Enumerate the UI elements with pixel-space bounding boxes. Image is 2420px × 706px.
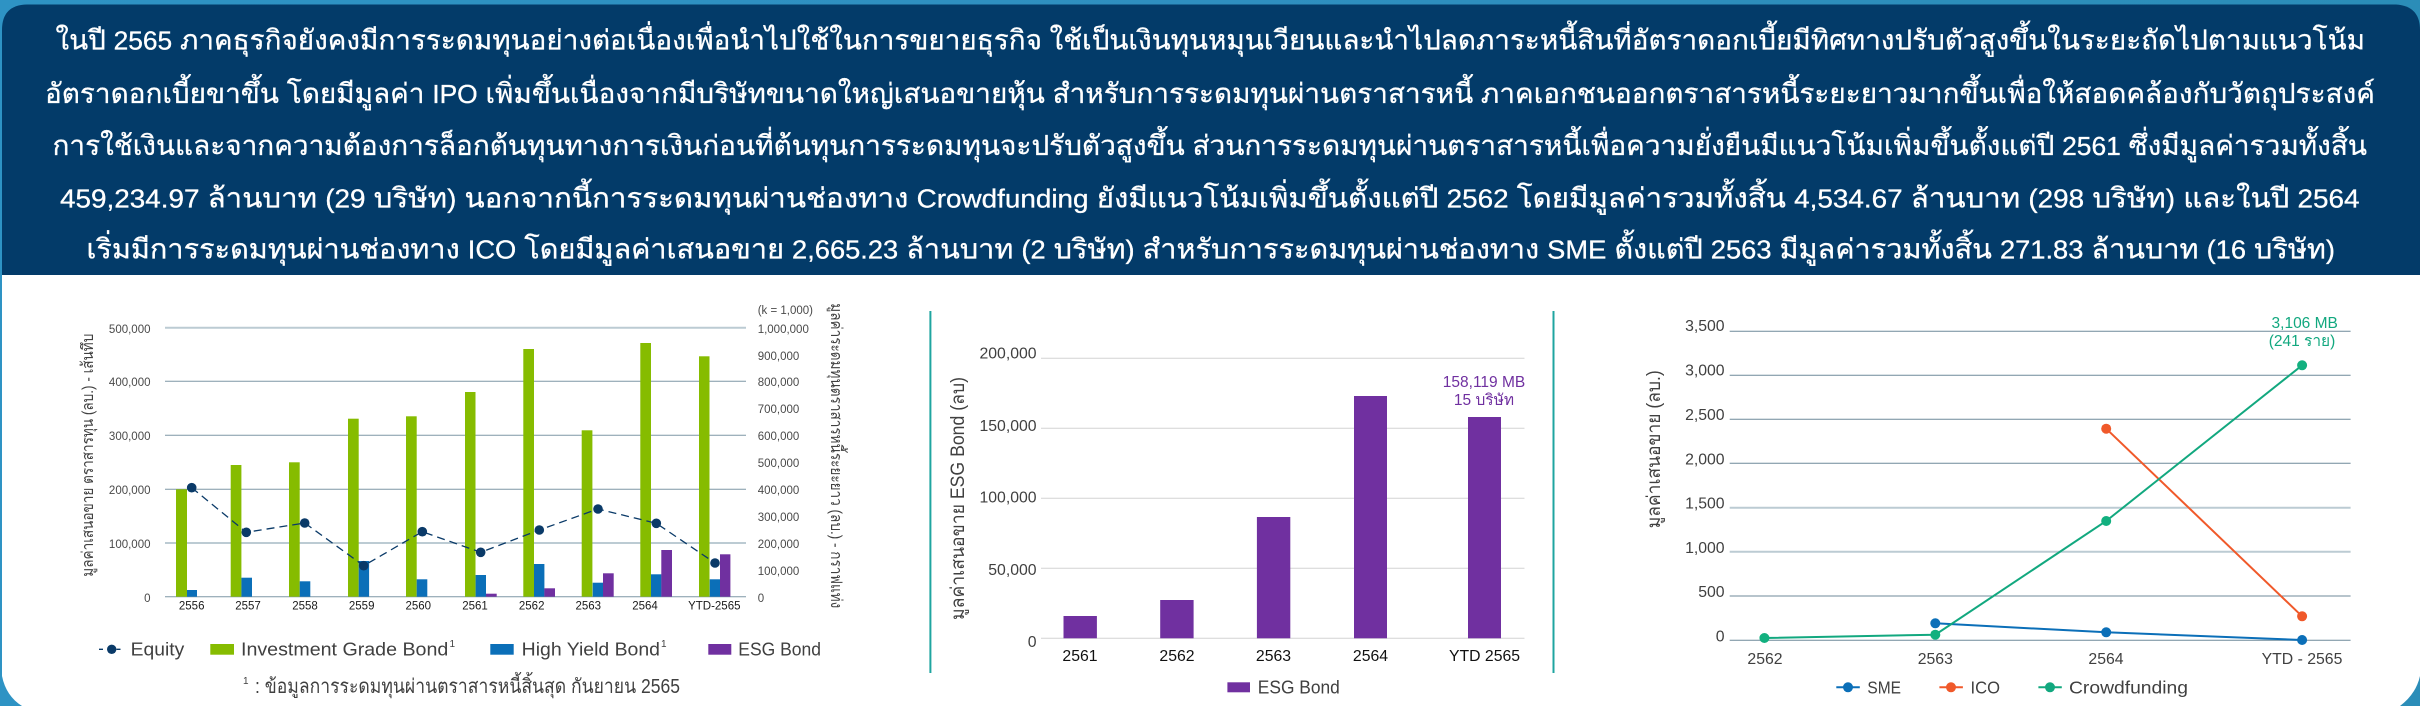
callout: 3,106 MB: [2269, 315, 2338, 350]
x axis labels: 2562: [519, 600, 544, 612]
bars: investment grade bond: [176, 343, 710, 597]
header background: [2, 4, 2420, 275]
y axis labels: 2,500: [1685, 407, 1725, 424]
legend: Equity: [131, 640, 184, 660]
x axis labels: 2559: [349, 600, 374, 612]
header text block: อัตราดอกเบี้ยขาขึ้น โดยมีมูลค่า IPO เพิ่มขึ้นเนื่องจากมีบริษัทขนาดใหญ่เสนอขายหุ้น สำหรับการระดมทุนผ่านตราสารหนี้ ภาคเอกชนออกตราสารหนี้ระยะยาวมากขึ้นเพื่อให้สอดคล้องกับวัตถุประสงค์: [45, 74, 2375, 111]
y axis labels: 2,000: [1685, 452, 1725, 468]
y axis labels: 200,000: [979, 346, 1037, 362]
footnote: 1: [243, 676, 249, 687]
left axis labels: 200,000: [109, 485, 150, 497]
x axis labels: [1747, 651, 2343, 668]
footnote: : ข้อมูลการระดมทุนผ่านตราสารหนี้สิ้นสุด กันยายน 2565: [255, 672, 680, 699]
right axis labels: 500,000: [758, 458, 799, 470]
x axis labels: 2563: [1256, 648, 1291, 665]
y axis labels: 100,000: [979, 490, 1037, 506]
right axis labels: 100,000: [758, 566, 799, 578]
x axis labels: 2564: [632, 600, 658, 612]
left axis labels: 300,000: [109, 431, 150, 443]
x axis labels: 2562: [1159, 648, 1195, 665]
y axis labels: 3,000: [1685, 362, 1725, 380]
left axis labels: 400,000: [109, 377, 150, 389]
right axis title: มูลค่าระดมทุนตราสารหนี้ระยะยาว (ลบ.) - กราฟแท่ง: [826, 303, 848, 608]
right axis labels: [758, 305, 813, 605]
header text block: เริ่มมีการระดมทุนผ่านช่องทาง ICO โดยมีมูลค่าเสนอขาย 2,665.23 ล้านบาท (2 บริษัท) สำหรับการระดมทุนผ่านช่องทาง SME ตั้งแต่ปี 2563 มีมูลค่ารวมทั้งสิ้น 271.83 ล้านบาท (16 บริษัท): [86, 229, 2335, 266]
left axis labels: 0: [144, 593, 150, 605]
x axis labels: 2557: [235, 600, 261, 612]
y axis labels: 0: [1028, 634, 1037, 651]
y axis labels: [979, 346, 1037, 651]
left axis title: มูลค่าเสนอขาย ตราสารทุน (ลบ.) - เส้นทึบ: [79, 334, 98, 577]
line: equity: [187, 483, 720, 570]
legend: 1: [661, 639, 667, 650]
panel: ESG bond chart: [930, 311, 1554, 698]
callout: 158,119 MB: 158,119 MB: [1443, 374, 1525, 391]
y axis labels: 3,500: [1685, 318, 1725, 335]
line: SME: [1930, 618, 2307, 645]
callout: 3,106 MB: 3,106 MB: [2272, 315, 2338, 332]
right axis labels: 400,000: [758, 485, 799, 497]
panel: SME ICO crowdfunding line chart: [1644, 315, 2351, 698]
x axis labels: 2562: [1747, 651, 1783, 668]
legend: ICO: [1970, 678, 2000, 698]
x axis labels: 2558: [292, 600, 318, 612]
x axis labels: 2564: [2088, 651, 2124, 668]
bars: ESG bond: [486, 550, 730, 597]
x axis labels: 2564: [1353, 648, 1388, 665]
right axis labels: 800,000: [758, 377, 799, 389]
y axis title: มูลค่าเสนอขาย ESG Bond (ลบ): [948, 377, 969, 620]
x axis labels: 2560: [406, 600, 431, 612]
callout: 3,106 MB: (241 ราย): [2269, 333, 2335, 350]
y axis labels: 0: [1716, 628, 1725, 646]
x axis labels: 2561: [462, 600, 488, 612]
white content panel: [2, 274, 2420, 706]
legend: ESG Bond: [1258, 678, 1340, 698]
header text block: 459,234.97 ล้านบาท (29 บริษัท) นอกจากนี้การระดมทุนผ่านช่องทาง Crowdfunding ยังมีแนวโน้มเพิ่มขึ้นตั้งแต่ปี 2562 โดยมีมูลค่ารวมทั้งสิ้น 4,534.67 ล้านบาท (298 บริษัท) และในปี 2564: [60, 178, 2359, 215]
header text block: การใช้เงินและจากความต้องการล็อกต้นทุนทางการเงินก่อนที่ต้นทุนการระดมทุนจะปรับตัวสูงขึ้น ส่วนการระดมทุนผ่านตราสารหนี้เพื่อความยั่งยืนมีแนวโน้มเพิ่มขึ้นตั้งแต่ปี 2561 ซึ่งมีมูลค่ารวมทั้งสิ้น: [52, 126, 2367, 163]
divider lines: [930, 311, 1554, 673]
header text block: [45, 20, 2375, 266]
y axis title: มูลค่าเสนอขาย (ลบ.): [1644, 370, 1665, 528]
right axis labels: 900,000: [758, 351, 799, 363]
x axis labels: [179, 600, 741, 612]
right axis labels: 0: [758, 593, 764, 605]
x axis labels: 2561: [1062, 648, 1098, 665]
line: crowdfunding: [1759, 360, 2307, 643]
right axis labels: 700,000: [758, 404, 799, 416]
legend: Crowdfunding: [2069, 678, 2188, 698]
legend: 1: [450, 639, 456, 650]
legend: [1836, 678, 2188, 698]
x axis labels: YTD 2565: [1449, 648, 1520, 665]
x axis labels: YTD - 2565: [2262, 651, 2343, 668]
legend: [99, 639, 821, 660]
right axis labels: 1,000,000: [758, 324, 809, 336]
y axis labels: 1,500: [1685, 496, 1725, 512]
header panel: [2, 4, 2420, 275]
bars: high yield bond: [187, 561, 720, 597]
right axis labels: (k = 1,000): [758, 305, 813, 317]
left axis labels: [109, 324, 150, 605]
legend: Investment Grade Bond: [241, 640, 448, 660]
y axis labels: 500: [1698, 584, 1725, 601]
left axis labels: 100,000: [109, 539, 150, 551]
x axis labels: 2563: [1918, 651, 1953, 668]
x axis labels: 2556: [179, 600, 204, 612]
bars: ESG bond by year: [1064, 396, 1501, 638]
right axis labels: 600,000: [758, 431, 799, 443]
legend: ESG Bond: [738, 640, 821, 660]
right axis labels: 300,000: [758, 512, 799, 524]
right axis labels: 200,000: [758, 539, 799, 551]
left axis labels: 500,000: [109, 324, 150, 336]
header text block: ในปี 2565 ภาคธุรกิจยังคงมีการระดมทุนอย่างต่อเนื่องเพื่อนำไปใช้ในการขยายธุรกิจ ใช้เป็นเงินทุนหมุนเวียนและนำไปลดภาระหนี้สินที่อัตราดอกเบี้ยมีทิศทางปรับตัวสูงขึ้นในระยะถัดไปตามแนวโน้ม: [56, 20, 2365, 58]
callout: 158,119 MB: 15 บริษัท: [1454, 392, 1514, 409]
y axis labels: [1685, 318, 1725, 646]
x axis labels: YTD-2565: [688, 600, 741, 612]
x axis labels: [1062, 648, 1520, 665]
y axis labels: 50,000: [988, 562, 1037, 579]
legend: High Yield Bond: [522, 640, 660, 660]
y axis labels: 150,000: [979, 418, 1037, 435]
line: ICO: [2101, 424, 2307, 621]
x axis labels: 2563: [576, 600, 601, 612]
callout: 158,119 MB: [1443, 374, 1525, 409]
y axis labels: 1,000: [1685, 540, 1725, 557]
chart: capital raising combo bars and equity line: [79, 303, 848, 699]
legend: SME: [1867, 678, 1901, 698]
